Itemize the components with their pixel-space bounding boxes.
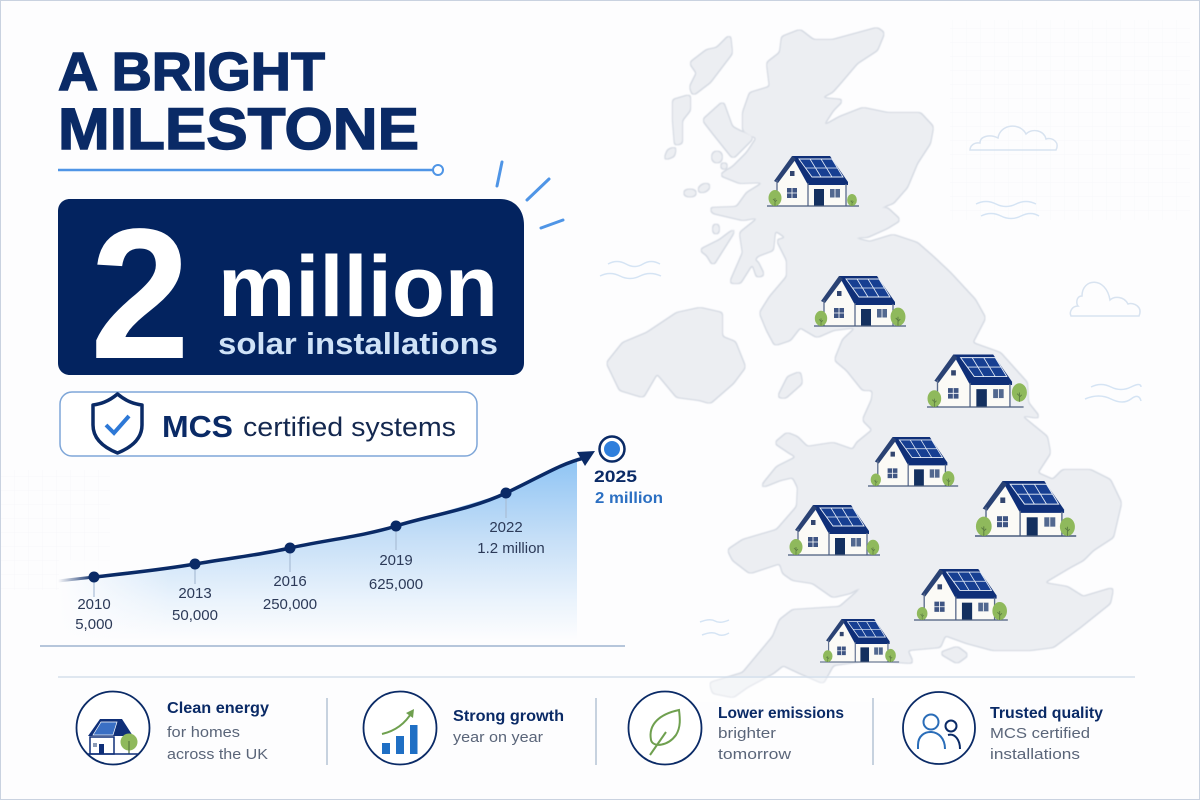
map: Northern Ireland [607, 308, 745, 403]
feature: lower emissions: Lower emissions [718, 705, 844, 722]
house: Northern England [814, 276, 906, 326]
map: Arran [752, 261, 764, 277]
labels: 2010 [77, 596, 111, 613]
growth curve [94, 458, 584, 577]
house: Yorkshire [927, 354, 1027, 407]
map: Lewis [690, 35, 732, 95]
labels: 1.2 million [477, 540, 545, 557]
feature: clean energy: Clean energy [167, 700, 269, 717]
labels: 2016 [273, 573, 307, 590]
title underline [58, 165, 443, 175]
feature: trusted quality: installations [990, 746, 1080, 763]
MCS badge [60, 392, 477, 456]
map: Skye [703, 102, 753, 158]
house: Scotland [767, 156, 859, 206]
big number: 2 [90, 191, 190, 398]
labels: 50,000 [172, 607, 218, 624]
map: Islay [700, 227, 737, 265]
sparkle rays [497, 162, 563, 228]
feature: clean energy: for homes [167, 724, 240, 741]
feature: strong growth: Strong growth [453, 708, 564, 725]
title: MILESTONE [58, 97, 419, 162]
map: Isle of Wight [940, 647, 968, 663]
feature: lower emissions [628, 692, 844, 764]
map: UK and Ireland [607, 28, 1121, 697]
badge text: MCS [162, 409, 233, 444]
target marker [600, 436, 624, 462]
label 2025: 2025 [594, 467, 637, 486]
house: South [914, 569, 1008, 620]
chart area [59, 460, 577, 642]
axis [40, 645, 625, 647]
cloud: upper right [970, 126, 1057, 150]
icon: people [918, 714, 960, 749]
footer [58, 677, 1135, 765]
labels: 625,000 [369, 576, 423, 593]
house: Wales [788, 505, 880, 555]
map: Great Britain mainland [710, 28, 1121, 697]
label 2025: 2 million [595, 490, 663, 507]
labels: 2019 [379, 552, 413, 569]
feature: trusted quality: Trusted quality [990, 705, 1103, 722]
icon: shield [93, 394, 142, 453]
feature: strong growth [364, 692, 564, 764]
arrow head [577, 451, 595, 466]
map: small isles [684, 152, 727, 234]
feature: strong growth: year on year [453, 729, 543, 746]
million: million [218, 239, 498, 335]
map: Uist [673, 95, 690, 145]
MCS badge: certified systems [243, 412, 456, 442]
icon: house [88, 719, 138, 754]
map: Isle of Man [778, 372, 802, 398]
lead-in [58, 577, 94, 581]
growth chart [40, 436, 663, 646]
map: Barra [664, 147, 676, 160]
stems [94, 493, 506, 597]
labels: 2013 [178, 585, 212, 602]
title [58, 42, 419, 162]
labels: 5,000 [75, 616, 113, 633]
labels [75, 519, 545, 633]
cloud: lower right [1070, 282, 1140, 316]
feature: clean energy: across the UK [167, 746, 268, 763]
labels: 2022 [489, 519, 523, 536]
feature: trusted quality [903, 692, 1103, 764]
label 2025 [594, 467, 663, 507]
house: East [975, 481, 1076, 536]
feature: lower emissions: tomorrow [718, 746, 791, 763]
labels: 250,000 [263, 596, 317, 613]
data points [88, 488, 512, 582]
feature: trusted quality: MCS certified [990, 725, 1090, 742]
title: A BRIGHT [58, 42, 325, 102]
subtitle: solar installations [218, 326, 498, 361]
house: South West [820, 619, 899, 662]
waves [600, 202, 1141, 635]
feature: lower emissions: brighter [718, 725, 776, 742]
headline panel [58, 191, 524, 398]
house: Midlands [868, 437, 958, 486]
houses on map [767, 156, 1076, 662]
map fade behind footer [680, 678, 980, 702]
icon: bars and arrow [382, 709, 418, 754]
feature: clean energy [76, 692, 269, 764]
icon: leaf [650, 710, 680, 755]
